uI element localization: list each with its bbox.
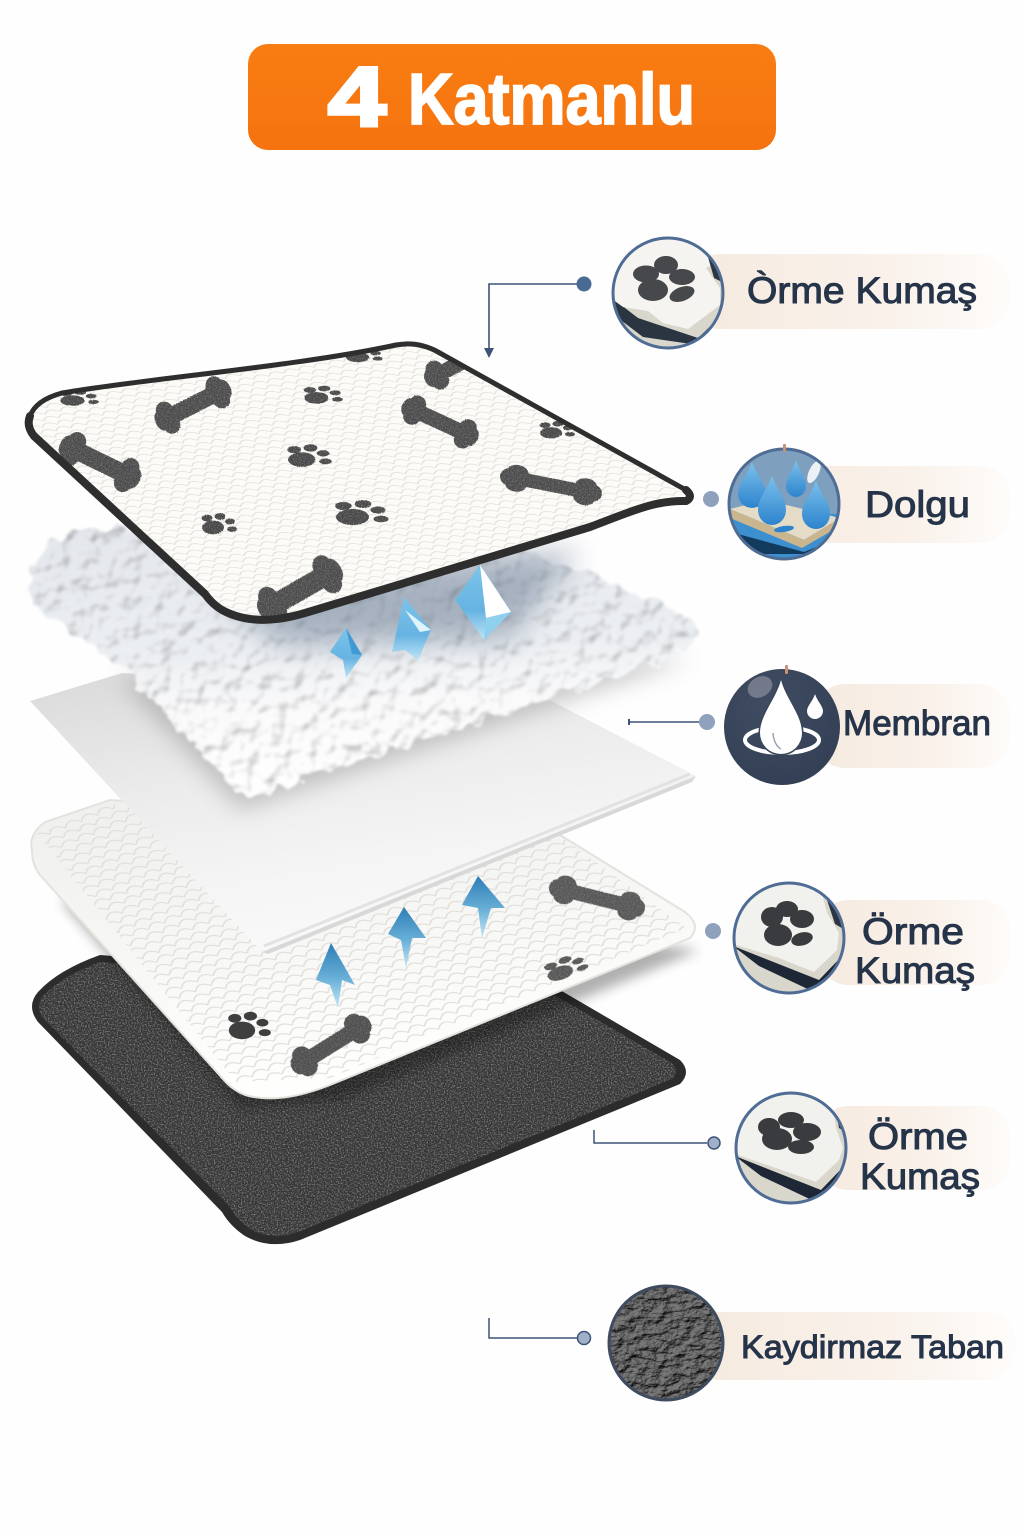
layer: fluffy filling: [29, 528, 698, 798]
callout: Örme Kumaş top: [484, 237, 1010, 358]
title banner: Katmanlu: [408, 60, 695, 140]
icon: rubber texture swatch: [609, 1286, 723, 1400]
bone print: [290, 1014, 372, 1077]
callout: Örme Kumaş second: [705, 882, 1010, 994]
label text: Örme: [862, 911, 964, 952]
crystal large: [455, 565, 511, 640]
label text: Kumaş: [860, 1156, 980, 1197]
label text: Kaydirmaz Taban: [741, 1329, 1004, 1365]
leader line: [489, 1318, 590, 1344]
label pill: [760, 466, 1010, 543]
mat binding edge: [29, 344, 690, 620]
paw print: [228, 1012, 271, 1039]
layer: waterproof membrane: [30, 650, 696, 954]
leader line with arrow: [484, 276, 592, 358]
label text: Dolgu: [865, 484, 970, 525]
leader line: [594, 1130, 720, 1149]
layer: non-slip dark base mat: [32, 955, 686, 1244]
label text: Örme: [868, 1116, 968, 1157]
callout: Membran: [628, 665, 1010, 785]
leader dot: [705, 923, 721, 939]
title banner: 4: [328, 50, 386, 144]
arrow 1: [316, 943, 355, 1008]
callout: Dolgu: [703, 444, 984, 560]
label pill: [820, 1106, 1010, 1190]
paw print clipped: [544, 956, 589, 982]
layer: top quilted mat with bone and paw prints: [29, 329, 690, 645]
bone print: [548, 875, 646, 921]
layer: quilted knit fabric (lower): [31, 800, 700, 1108]
icon: fabric swatch: [735, 1092, 847, 1204]
leader line: [628, 714, 715, 730]
callout: Örme Kumaş third: [594, 1092, 1010, 1204]
callout: Kaydirmaz Taban: [489, 1286, 1015, 1400]
label text: Òrme Kumaş: [747, 270, 977, 311]
icon: fabric swatch: [733, 882, 845, 994]
icon: water drop badge: [724, 665, 840, 785]
print: bones: [58, 360, 602, 616]
lower airflow arrows: [316, 876, 505, 1008]
leader dot: [703, 491, 719, 507]
crystal small: [330, 628, 362, 678]
label pill: [815, 684, 1010, 768]
upper moisture crystals: [330, 565, 511, 678]
title banner: [248, 44, 776, 150]
label pill: [690, 1312, 1015, 1380]
label pill: [820, 900, 1010, 985]
arrow 2: [388, 907, 426, 968]
label text: Kumaş: [855, 950, 975, 991]
icon: droplets on filling: [728, 444, 840, 564]
label pill: [690, 254, 1010, 329]
label text: Membran: [843, 704, 991, 743]
icon: fabric swatch with paw: [612, 237, 724, 349]
print: paws: [60, 347, 575, 534]
crystal medium: [392, 597, 431, 660]
arrow 3: [462, 876, 505, 938]
shadow cast onto filling: [210, 550, 580, 645]
